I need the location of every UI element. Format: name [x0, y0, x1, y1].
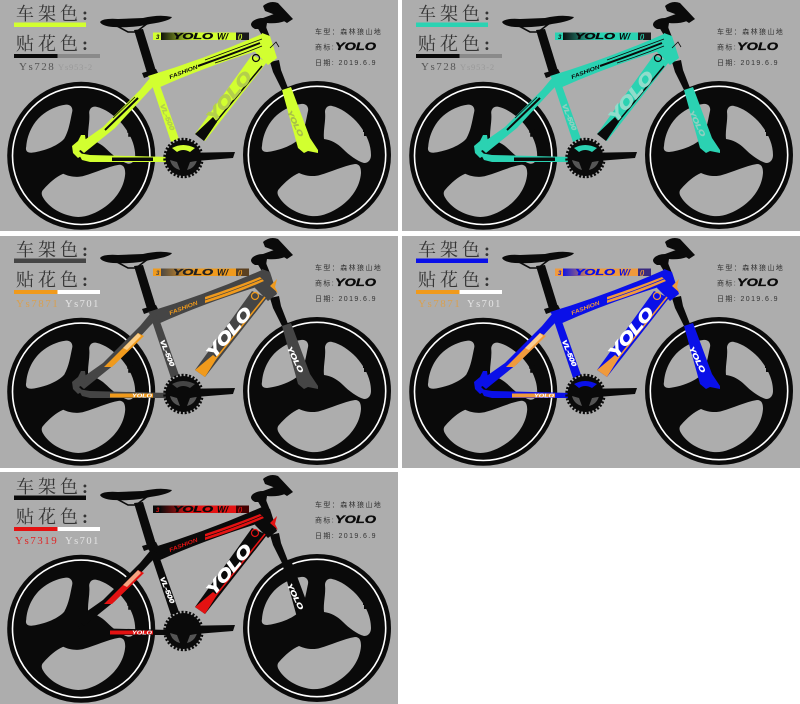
- heading: decal colour: Ys701: [65, 536, 100, 547]
- specs: YOLO: [737, 41, 779, 53]
- frame decals: YOLO: [204, 68, 256, 126]
- specs: 日期: 2019.6.9: [315, 59, 377, 67]
- decal strip: (): [640, 34, 644, 40]
- specs: YOLO: [335, 277, 377, 289]
- decal strip: YOLO: [575, 32, 616, 41]
- specs: 商标:: [315, 42, 335, 52]
- heading: decal colour: [14, 34, 100, 73]
- specs: YOLO: [737, 277, 779, 289]
- heading: decal colour: Ys701: [65, 299, 100, 310]
- heading: decal colour: Ys701: [467, 299, 502, 310]
- specs: [717, 27, 784, 67]
- panel: black and red bike: [0, 472, 398, 704]
- decal strip: [153, 504, 249, 514]
- frame decals: [506, 277, 706, 400]
- specs: 商标:: [315, 516, 335, 524]
- decal strip: 3: [156, 508, 160, 514]
- decal strip: [153, 32, 249, 42]
- frame decals: [104, 514, 304, 636]
- decal strip: (): [238, 34, 242, 40]
- heading: decal colour: [14, 270, 100, 310]
- heading: frame colour: 车架色:: [16, 4, 92, 24]
- frame: [474, 33, 720, 162]
- frame decals: YOLO: [285, 583, 304, 612]
- frame decals: VL-500: [158, 339, 175, 368]
- frame: [72, 506, 318, 635]
- rear wheel: [409, 318, 557, 466]
- frame decals: YOLO: [687, 346, 706, 375]
- decal strip: [555, 268, 651, 278]
- specs: 商标:: [315, 278, 335, 288]
- heading: decal colour: [416, 270, 502, 310]
- specs: [315, 27, 382, 67]
- heading: decal colour: [416, 34, 502, 73]
- frame decals: YOLO: [204, 541, 256, 599]
- frame decals: FASHION: [169, 537, 200, 554]
- frame decals: YOLO: [687, 110, 706, 139]
- heading: decal colour: Ys7871: [418, 298, 461, 310]
- decal strip: 3: [156, 271, 160, 277]
- frame decals: [104, 277, 304, 400]
- decal strip: YOLO: [173, 32, 214, 41]
- decal strip: YOLO: [575, 268, 616, 277]
- specs: 日期: 2019.6.9: [315, 532, 377, 540]
- heading: frame colour: 车架色:: [16, 477, 92, 497]
- rear wheel: [7, 318, 155, 466]
- saddle and handlebar: [100, 475, 293, 563]
- frame decals: YOLO: [204, 304, 256, 362]
- chainring and crank: [165, 612, 235, 650]
- decal strip: 3: [156, 35, 160, 41]
- specs: 日期: 2019.6.9: [717, 59, 779, 67]
- saddle and handlebar: [100, 2, 293, 90]
- decal strip: W/: [619, 268, 631, 278]
- front wheel: [243, 554, 391, 702]
- chainring and crank: [165, 140, 235, 176]
- front wheel: [243, 81, 391, 229]
- decal strip: (): [640, 270, 644, 276]
- specs: 车型：森林狼山地: [315, 500, 382, 509]
- frame decals: [507, 39, 706, 161]
- frame decals: YOLO: [606, 304, 658, 362]
- decal strip: (): [238, 270, 242, 276]
- heading: frame colour: 车架色:: [418, 4, 494, 24]
- decal strip: W/: [619, 32, 631, 42]
- specs: 商标:: [717, 42, 737, 52]
- frame decals: FASHION: [169, 300, 200, 317]
- specs: YOLO: [335, 41, 377, 53]
- chainring and crank: [567, 140, 637, 176]
- specs: 车型：森林狼山地: [717, 27, 784, 36]
- frame decals: YOLO: [285, 346, 304, 375]
- frame decals: FASHION: [169, 64, 200, 81]
- frame decals: FASHION: [571, 64, 602, 81]
- decal strip: W/: [217, 504, 229, 514]
- decal strip: YOLO: [173, 505, 214, 514]
- heading: decal colour: 贴花色:: [418, 34, 494, 54]
- frame decals: VL-500: [560, 339, 577, 368]
- front wheel: [645, 317, 793, 465]
- saddle and handlebar: [502, 2, 695, 90]
- specs: 日期: 2019.6.9: [717, 295, 779, 303]
- heading: decal colour: Ys953-2: [460, 62, 495, 72]
- panel: teal bike: [402, 0, 800, 231]
- specs: [717, 263, 784, 303]
- heading: decal colour: Ys728: [421, 61, 457, 73]
- specs: 车型：森林狼山地: [315, 263, 382, 272]
- heading: decal colour: Ys7319: [15, 535, 58, 547]
- saddle and handlebar: [100, 238, 293, 326]
- rear wheel: [7, 82, 155, 230]
- specs: YOLO: [335, 514, 377, 526]
- decal strip: W/: [217, 268, 229, 278]
- heading: decal colour: Ys7871: [16, 298, 59, 310]
- frame decals: YOLO: [285, 110, 304, 139]
- specs: 商标:: [717, 278, 737, 288]
- heading: decal colour: 贴花色:: [418, 270, 494, 290]
- panel: blue bike: [402, 236, 800, 468]
- rear wheel: [7, 555, 155, 703]
- decal strip: [555, 32, 651, 42]
- saddle and handlebar: [502, 238, 695, 326]
- frame: [72, 33, 318, 162]
- frame decals: FASHION: [571, 300, 602, 317]
- heading: frame colour: 车架色:: [418, 240, 494, 260]
- frame decals: [105, 39, 304, 161]
- frame: [474, 269, 720, 398]
- chainring and crank: [567, 376, 637, 412]
- decal strip: W/: [217, 32, 229, 42]
- heading: decal colour: 贴花色:: [16, 507, 92, 527]
- frame decals: VL-500: [158, 576, 175, 605]
- front wheel: [645, 81, 793, 229]
- heading: decal colour: Ys953-2: [58, 62, 93, 72]
- specs: 日期: 2019.6.9: [315, 295, 377, 303]
- specs: [315, 500, 382, 540]
- front wheel: [243, 317, 391, 465]
- specs: 车型：森林狼山地: [315, 27, 382, 36]
- heading: decal colour: [14, 507, 100, 547]
- chainring and crank: [165, 376, 235, 412]
- frame decals: YOLO: [606, 68, 658, 126]
- frame decals: YOLO: [132, 630, 152, 636]
- decal strip: [153, 268, 249, 278]
- frame decals: VL-500: [560, 103, 577, 132]
- frame decals: YOLO: [534, 394, 554, 400]
- panel: lime bike: [0, 0, 398, 231]
- decal strip: (): [238, 506, 242, 514]
- decal strip: 3: [558, 271, 562, 277]
- heading: decal colour: Ys728: [19, 61, 55, 73]
- heading: frame colour: 车架色:: [16, 240, 92, 260]
- decal strip: 3: [558, 35, 562, 41]
- decal strip: YOLO: [173, 268, 214, 277]
- frame decals: YOLO: [132, 394, 152, 400]
- heading: decal colour: 贴花色:: [16, 270, 92, 290]
- panel: dark grey bike: [0, 236, 398, 468]
- frame decals: VL-500: [158, 103, 175, 132]
- heading: decal colour: 贴花色:: [16, 34, 92, 54]
- rear wheel: [409, 82, 557, 230]
- specs: [315, 263, 382, 303]
- frame: [72, 269, 318, 398]
- specs: 车型：森林狼山地: [717, 263, 784, 272]
